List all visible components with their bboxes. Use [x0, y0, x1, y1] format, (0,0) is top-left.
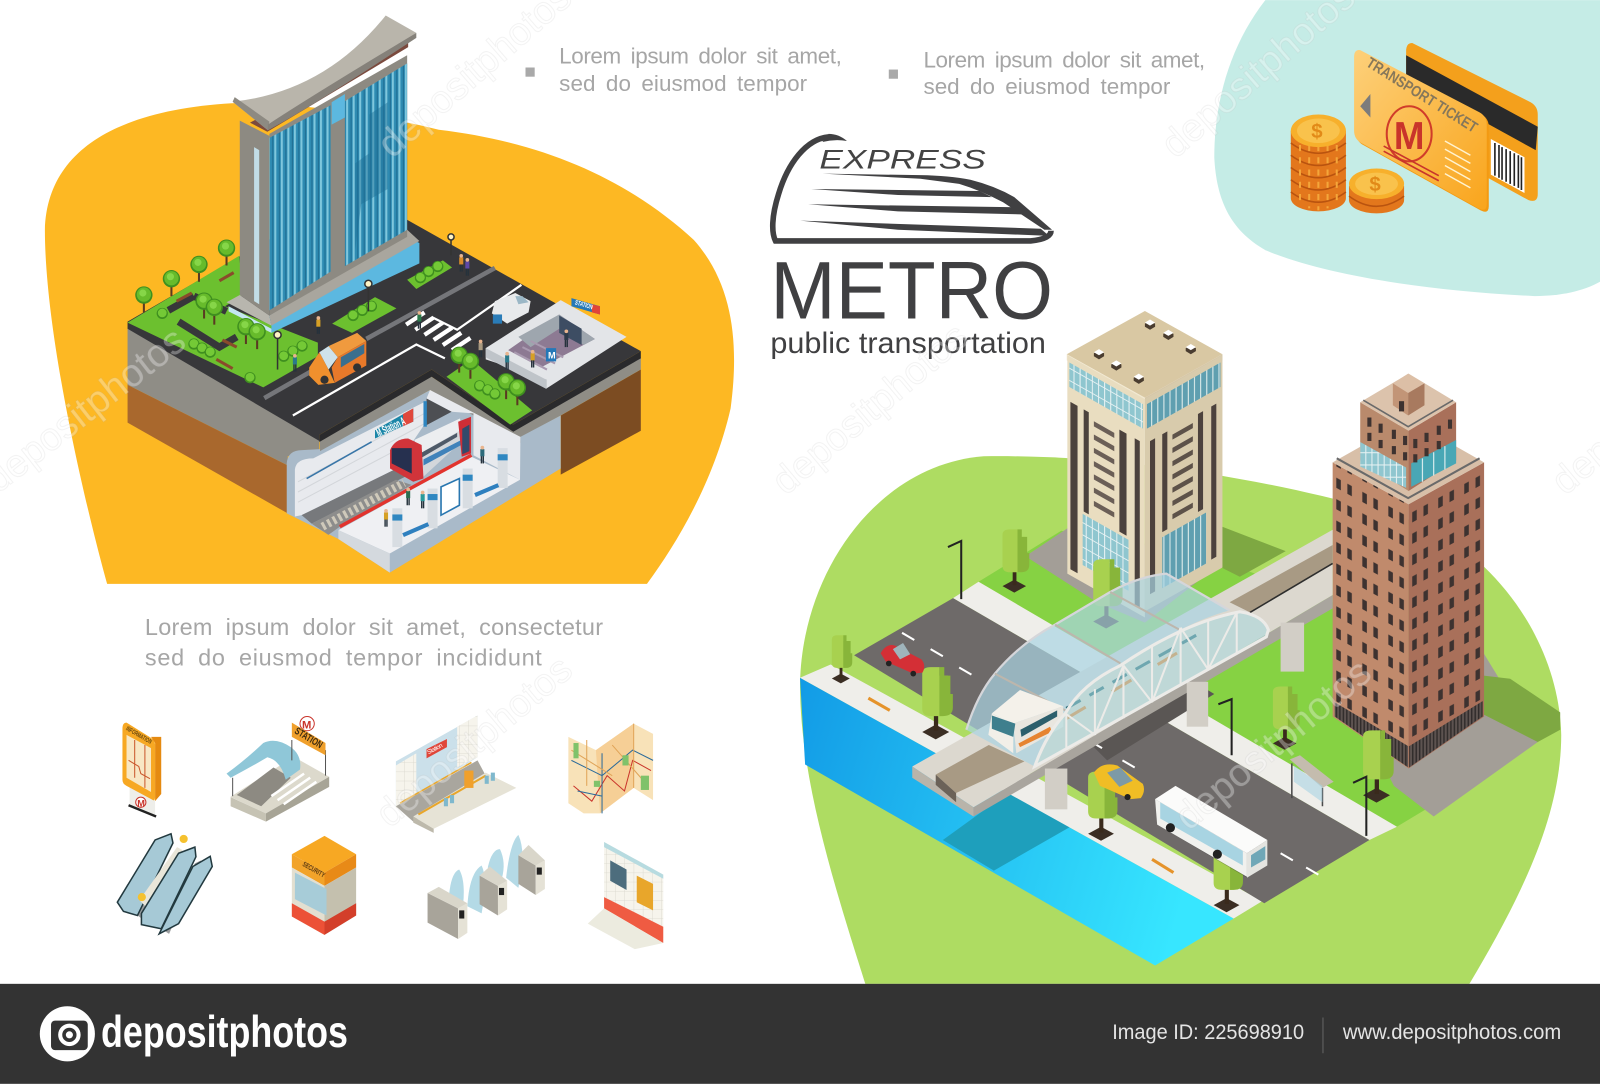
- subtitle: public transportation: [770, 327, 1046, 360]
- caption: Lorem ipsum dolor sit amet,: [559, 43, 842, 68]
- red platform edge: [340, 455, 471, 527]
- bullet: [889, 70, 898, 79]
- caption: [559, 43, 842, 96]
- entrance M sign: M: [548, 350, 556, 360]
- road markings: [293, 285, 521, 415]
- white van: [492, 293, 531, 324]
- passengers: [384, 446, 484, 527]
- text block: above icons: Lorem ipsum dolor sit amet, consectetur: [145, 614, 603, 640]
- office tower: [233, 15, 416, 315]
- watermarks: depositphotos: [764, 315, 976, 503]
- station name sign: [374, 408, 413, 440]
- route line on wall: [307, 442, 372, 479]
- park trees and bushes: [135, 239, 526, 405]
- station interior cutaway: [287, 376, 561, 573]
- ground tile grass: [979, 531, 1538, 827]
- building pavement: [1026, 526, 1538, 816]
- soil side faces: [128, 327, 641, 513]
- blob: teal backdrop: [1214, 0, 1600, 296]
- front of ticket: [1354, 50, 1489, 212]
- watermarks: depositphotos: [368, 648, 581, 836]
- small coin stack: [1349, 169, 1404, 213]
- coin stack: [1291, 114, 1346, 211]
- street surface: [128, 190, 641, 442]
- glass tube front side: [1035, 612, 1268, 766]
- caption: [923, 48, 1205, 99]
- image id: Image ID: 225698910: [1112, 1020, 1304, 1044]
- caption: Lorem ipsum dolor sit amet,: [923, 48, 1205, 73]
- caption: sed do eiusmod tempor: [559, 71, 808, 96]
- icon: information kiosk: M: [137, 798, 145, 808]
- roof units: [1094, 320, 1196, 384]
- icon: paper map: [568, 724, 653, 813]
- front of ticket: M: [1394, 115, 1424, 158]
- icon: station entrance: M: [302, 720, 311, 732]
- grass shadows: [1020, 526, 1560, 742]
- logo word: EXPRESS: [819, 145, 986, 175]
- benches in park: [177, 273, 237, 369]
- red car: [881, 643, 924, 676]
- watermarks: depositphotos: [1167, 651, 1379, 839]
- entrance M sign: [546, 348, 556, 361]
- icon: station entrance: [227, 716, 329, 822]
- icon: platform: [396, 715, 516, 833]
- yellow taxi: [1094, 764, 1144, 800]
- brick building: [1333, 374, 1484, 769]
- railway track: [312, 480, 412, 535]
- text block: top middle: [526, 43, 842, 96]
- road lane marks: [902, 633, 1318, 875]
- icon: station entrance: STATION: [292, 726, 324, 751]
- icon: escalators: [117, 834, 212, 934]
- pedestrians on street: [293, 254, 568, 372]
- scene: elevated metro street: [800, 311, 1560, 965]
- text block: top right: [889, 48, 1205, 99]
- icon: platform: Station: [426, 742, 444, 756]
- far sidewalk: [953, 582, 1397, 840]
- near sidewalk: [800, 664, 1262, 919]
- watermarks: [0, 0, 1600, 839]
- text block: above icons: [145, 614, 603, 670]
- white train: [988, 631, 1204, 753]
- city bus: [1155, 786, 1267, 878]
- icon: ticket gates: [428, 835, 545, 939]
- footer bar: [0, 984, 1600, 1084]
- scene: underground station block with tower: [128, 15, 641, 573]
- station direction sign: STATION: [574, 299, 594, 311]
- small coin stack: $: [1369, 174, 1381, 196]
- blob: orange backdrop: [45, 103, 734, 584]
- lamp posts: [948, 541, 1366, 836]
- street trees: [832, 529, 1394, 912]
- back of card: [1406, 43, 1538, 201]
- metro train: [390, 417, 471, 482]
- icon: information kiosk: INFORMATION: [125, 725, 153, 746]
- plinth: [227, 295, 271, 326]
- station name sign: M Station A: [374, 415, 408, 440]
- front of ticket: TRANSPORT TICKET: [1363, 54, 1481, 137]
- logo: express train: [773, 134, 1052, 241]
- icon: security booth: SECURITY: [301, 860, 326, 880]
- curved roof: [233, 15, 416, 132]
- illustration: ticket and coins: [1291, 43, 1538, 213]
- riverside benches: [868, 698, 1173, 873]
- website: www.depositphotos.com: [1342, 1020, 1561, 1044]
- orange minibus: [309, 333, 366, 385]
- benches: [403, 485, 498, 535]
- river: [800, 678, 1234, 965]
- street tree behind bridge: [1093, 559, 1123, 629]
- platform columns: [392, 448, 508, 547]
- bullet: [526, 68, 535, 77]
- metro entrance: [486, 298, 627, 389]
- icon: wall with ticket window: [588, 842, 663, 949]
- coin stack: $: [1311, 121, 1323, 143]
- bus stop: [1290, 755, 1334, 806]
- road: [854, 598, 1369, 903]
- glass tube back and roof: [966, 574, 1230, 766]
- beige building: [1067, 311, 1222, 618]
- text block: above icons: sed do eiusmod tempor incididunt: [145, 644, 542, 670]
- footer brand name: depositphotos: [101, 1006, 348, 1057]
- icon: information kiosk: [122, 723, 161, 816]
- blob: green backdrop: [800, 456, 1561, 984]
- street lamps: [274, 234, 454, 370]
- caption: sed do eiusmod tempor: [923, 74, 1171, 99]
- icon: security booth: [292, 836, 356, 935]
- footer logo icon: [40, 1006, 95, 1061]
- elevated railway: [912, 530, 1333, 816]
- title: METRO: [770, 246, 1053, 337]
- barcode: [1491, 139, 1524, 193]
- bridge pillars: [1045, 623, 1304, 809]
- platform billboard: [441, 479, 459, 515]
